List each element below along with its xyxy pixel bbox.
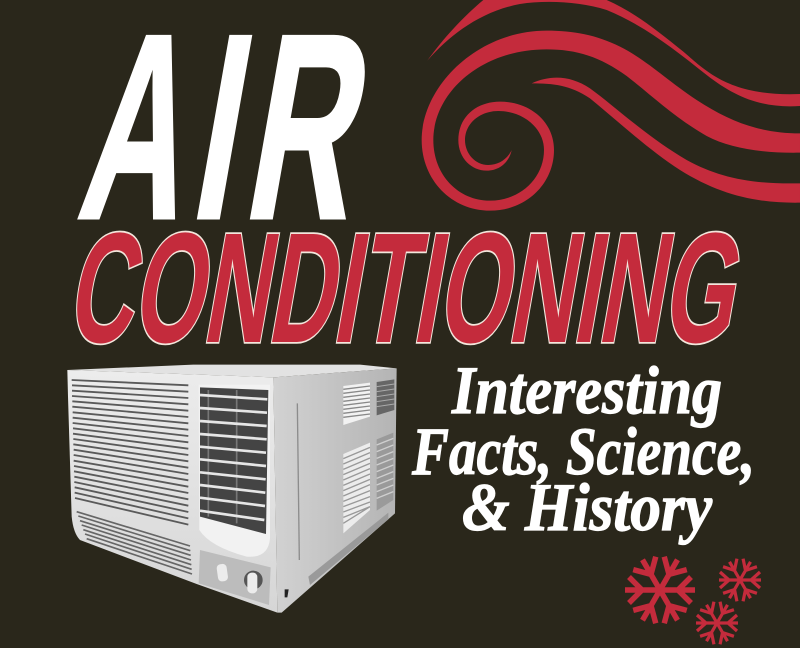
top face — [67, 365, 397, 377]
icon: large snowflake — [611, 541, 709, 639]
side vents — [285, 379, 394, 597]
decorative swirl — [422, 0, 800, 211]
air conditioner illustration — [67, 365, 397, 613]
control panel — [199, 550, 271, 605]
icon: lower snowflake — [687, 594, 747, 648]
side face — [273, 368, 397, 613]
icon: right snowflake — [710, 551, 770, 609]
main louvers — [72, 380, 188, 525]
centre vent — [199, 385, 270, 557]
subtitle: Interesting Facts, Science, & History — [411, 352, 755, 545]
subtitle: Interesting Facts, Science, & History: & History — [462, 469, 713, 545]
title: AIR — [65, 0, 390, 275]
front face — [67, 370, 277, 613]
subtitle: Interesting Facts, Science, & History: Interesting — [451, 352, 722, 428]
lower louvers — [77, 512, 192, 574]
